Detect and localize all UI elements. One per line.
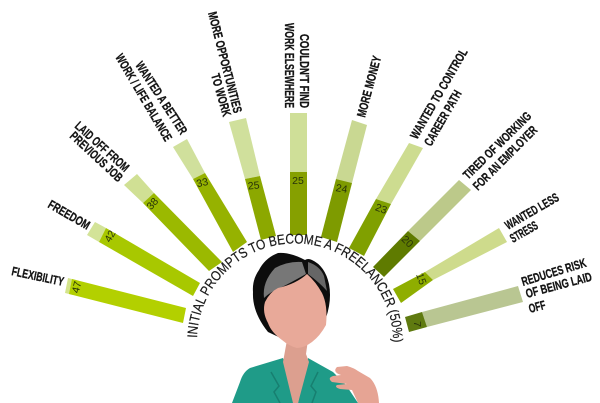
- label: reduces risk of being laid off: OFF: [527, 298, 547, 316]
- label: reduces risk of being laid off: [520, 256, 593, 316]
- label: tired of working for an employer: TIRED OF WORKING: [460, 109, 534, 182]
- bar: employer 20: 20: [399, 234, 416, 250]
- bar: better balance 33: [173, 139, 247, 252]
- label: freedom: FREEDOM: [46, 197, 92, 233]
- label: wanted a better work life balance: WORK / LIFE BALANCE: [112, 51, 175, 144]
- label: more opportunities to work: MORE OPPORTUNITIES: [205, 10, 245, 114]
- label: couldn't find work elsewhere: [282, 23, 311, 108]
- lapels: [271, 372, 318, 403]
- label: wanted to control career path: CAREER PATH: [421, 88, 465, 148]
- bar: freedom 42: 42: [102, 228, 119, 245]
- label: couldn't find work elsewhere: WORK ELSEWHERE: [282, 23, 296, 108]
- bar: less stress 15: [393, 228, 507, 303]
- label: more money: MORE MONEY: [354, 54, 384, 119]
- label: wanted to control career path: [407, 46, 471, 148]
- bar: laid off 38: 38: [144, 196, 161, 212]
- hand: [330, 366, 379, 403]
- bar: work elsewhere 25: 25: [292, 175, 304, 187]
- bar: freedom 42: [87, 222, 200, 296]
- bar: more opportunities 25: [229, 118, 276, 240]
- bar: more money 24: [321, 120, 367, 242]
- label: couldn't find work elsewhere: COULDN'T FIND: [297, 34, 311, 108]
- label: tired of working for an employer: FOR AN EMPLOYER: [470, 123, 540, 193]
- curved heading: INITIAL PROMPTS TO BECOME A FREELANCER (50%): [187, 234, 404, 342]
- bar: flexibility 47: [65, 278, 186, 323]
- label: wanted less stress: STRESS: [508, 218, 540, 246]
- label: more opportunities to work: TO WORK: [208, 72, 234, 118]
- jacket: [232, 358, 358, 403]
- label: wanted to control career path: WANTED TO CONTROL: [407, 46, 471, 142]
- label: more opportunities to work: [205, 10, 245, 118]
- hair highlights: [264, 262, 306, 298]
- bar: risk of layoff 7: [405, 286, 523, 332]
- bar: risk of layoff 7: 7: [411, 321, 423, 327]
- label: wanted less stress: WANTED LESS: [502, 190, 561, 233]
- label: tired of working for an employer: [460, 109, 540, 193]
- label: wanted a better work life balance: WANTED A BETTER: [132, 59, 190, 137]
- label: wanted less stress: [502, 190, 561, 246]
- bar: better balance 33: 33: [195, 176, 209, 190]
- bar: employer 20: [373, 180, 471, 277]
- bar: career path 23: 23: [373, 202, 389, 217]
- hair: [253, 253, 330, 340]
- label: flexibility: FLEXIBILITY: [10, 264, 66, 289]
- label: laid off from previous job: [67, 119, 132, 185]
- bar: career path 23: [349, 143, 423, 256]
- neck: [283, 340, 309, 403]
- label: laid off from previous job: PREVIOUS JOB: [67, 129, 126, 185]
- bar: laid off 38: [124, 174, 222, 271]
- person illustration: [232, 253, 379, 403]
- bar: flexibility 47: 47: [70, 280, 84, 294]
- label: wanted a better work life balance: [112, 51, 190, 144]
- face: [264, 274, 326, 348]
- bar: work elsewhere 25: [290, 113, 307, 235]
- bar: more money 24: 24: [335, 182, 348, 196]
- label: laid off from previous job: LAID OFF FROM: [72, 119, 132, 175]
- bar: more opportunities 25: 25: [247, 180, 260, 192]
- bar: less stress 15: 15: [413, 271, 429, 287]
